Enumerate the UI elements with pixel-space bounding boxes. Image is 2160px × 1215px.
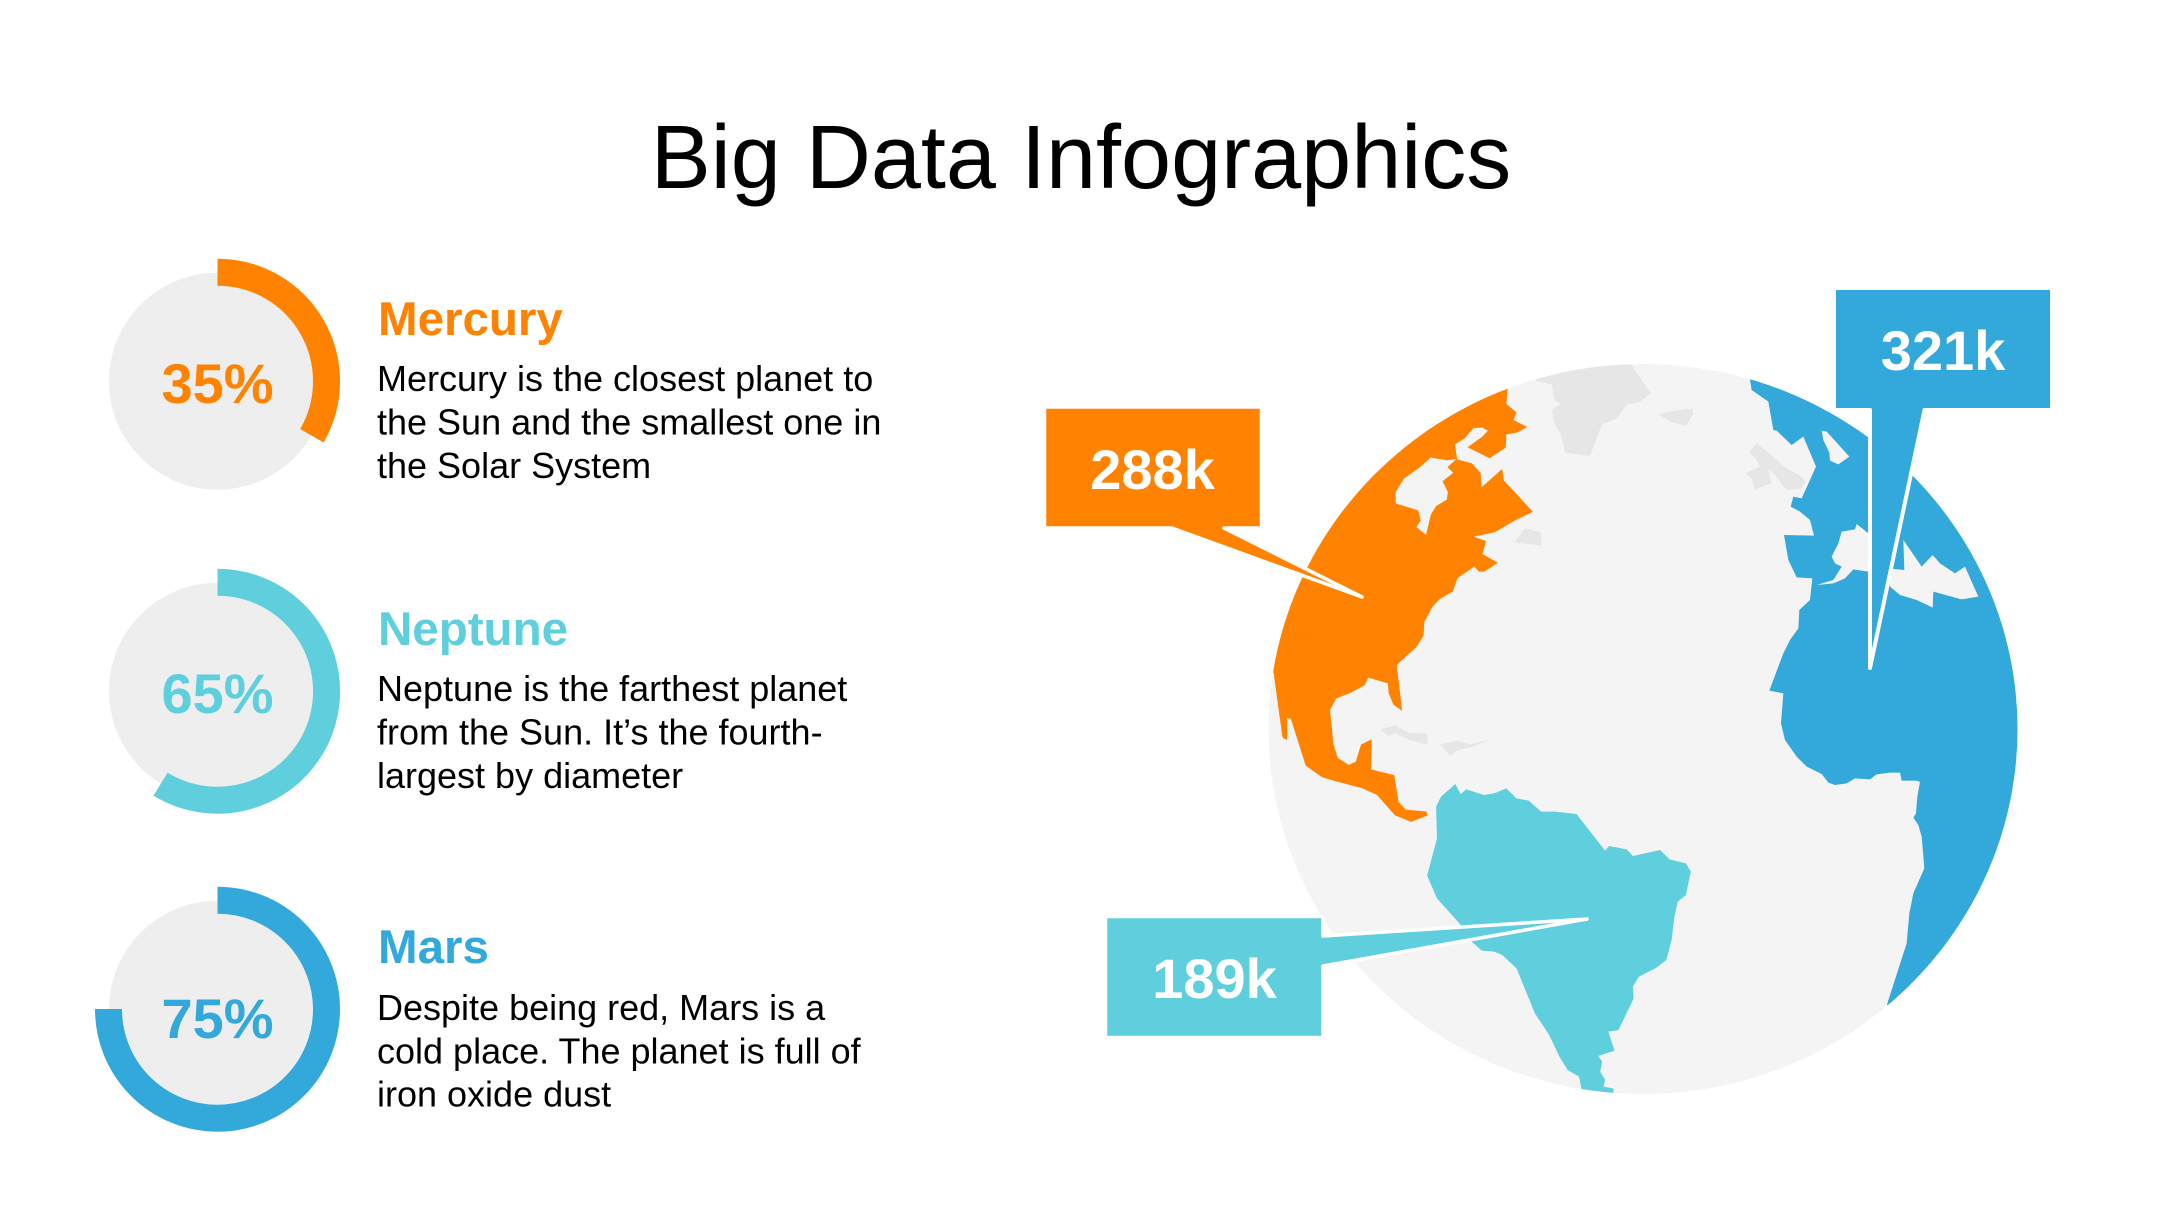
callout: 321k bbox=[1834, 288, 2052, 668]
heading: Neptune: Neptune bbox=[378, 603, 568, 656]
callout: 288k bbox=[1044, 407, 1362, 597]
description: Mercury: Mercury is the closest planet to bbox=[377, 358, 873, 399]
value: 35%: 35% bbox=[161, 352, 274, 415]
panel: Mercury bbox=[109, 272, 881, 490]
South America bbox=[1427, 784, 1691, 1100]
description: Neptune: Neptune is the farthest planet bbox=[377, 668, 847, 709]
heading: Mars: Mars bbox=[378, 921, 489, 974]
donut: Neptune 65% bbox=[109, 582, 327, 800]
grey landmasses bbox=[1381, 360, 1805, 756]
panel: Neptune bbox=[109, 582, 847, 800]
description: Mercury: the Solar System bbox=[377, 445, 651, 486]
donut: Mercury 35% bbox=[109, 272, 327, 490]
description: Mars: iron oxide dust bbox=[377, 1074, 611, 1114]
description: Mars: Despite being red, Mars is a bbox=[377, 987, 826, 1028]
description: Neptune: largest by diameter bbox=[377, 755, 683, 796]
globe disc bbox=[1268, 364, 2018, 1094]
North America bbox=[1273, 388, 1533, 822]
Europe and Africa bbox=[1750, 379, 2018, 1006]
globe map bbox=[1268, 364, 2018, 1094]
callout: 321k: 321k bbox=[1881, 319, 2006, 382]
callout: 189k: 189k bbox=[1152, 947, 1278, 1010]
description: Mars: cold place. The planet is full of bbox=[377, 1030, 862, 1072]
donut: Mars 75% bbox=[108, 900, 326, 1118]
description: Neptune: from the Sun. It’s the fourth- bbox=[377, 712, 823, 752]
callout: 288k: 288k bbox=[1090, 438, 1216, 501]
heading: Mercury: Mercury bbox=[378, 293, 563, 346]
title: Big Data Infographics bbox=[651, 108, 1511, 208]
description: Mercury: the Sun and the smallest one in bbox=[377, 402, 881, 442]
callout: 189k bbox=[1106, 916, 1587, 1038]
panel: Mars bbox=[108, 900, 862, 1118]
value: 65%: 65% bbox=[161, 662, 274, 725]
value: 75%: 75% bbox=[161, 987, 274, 1050]
